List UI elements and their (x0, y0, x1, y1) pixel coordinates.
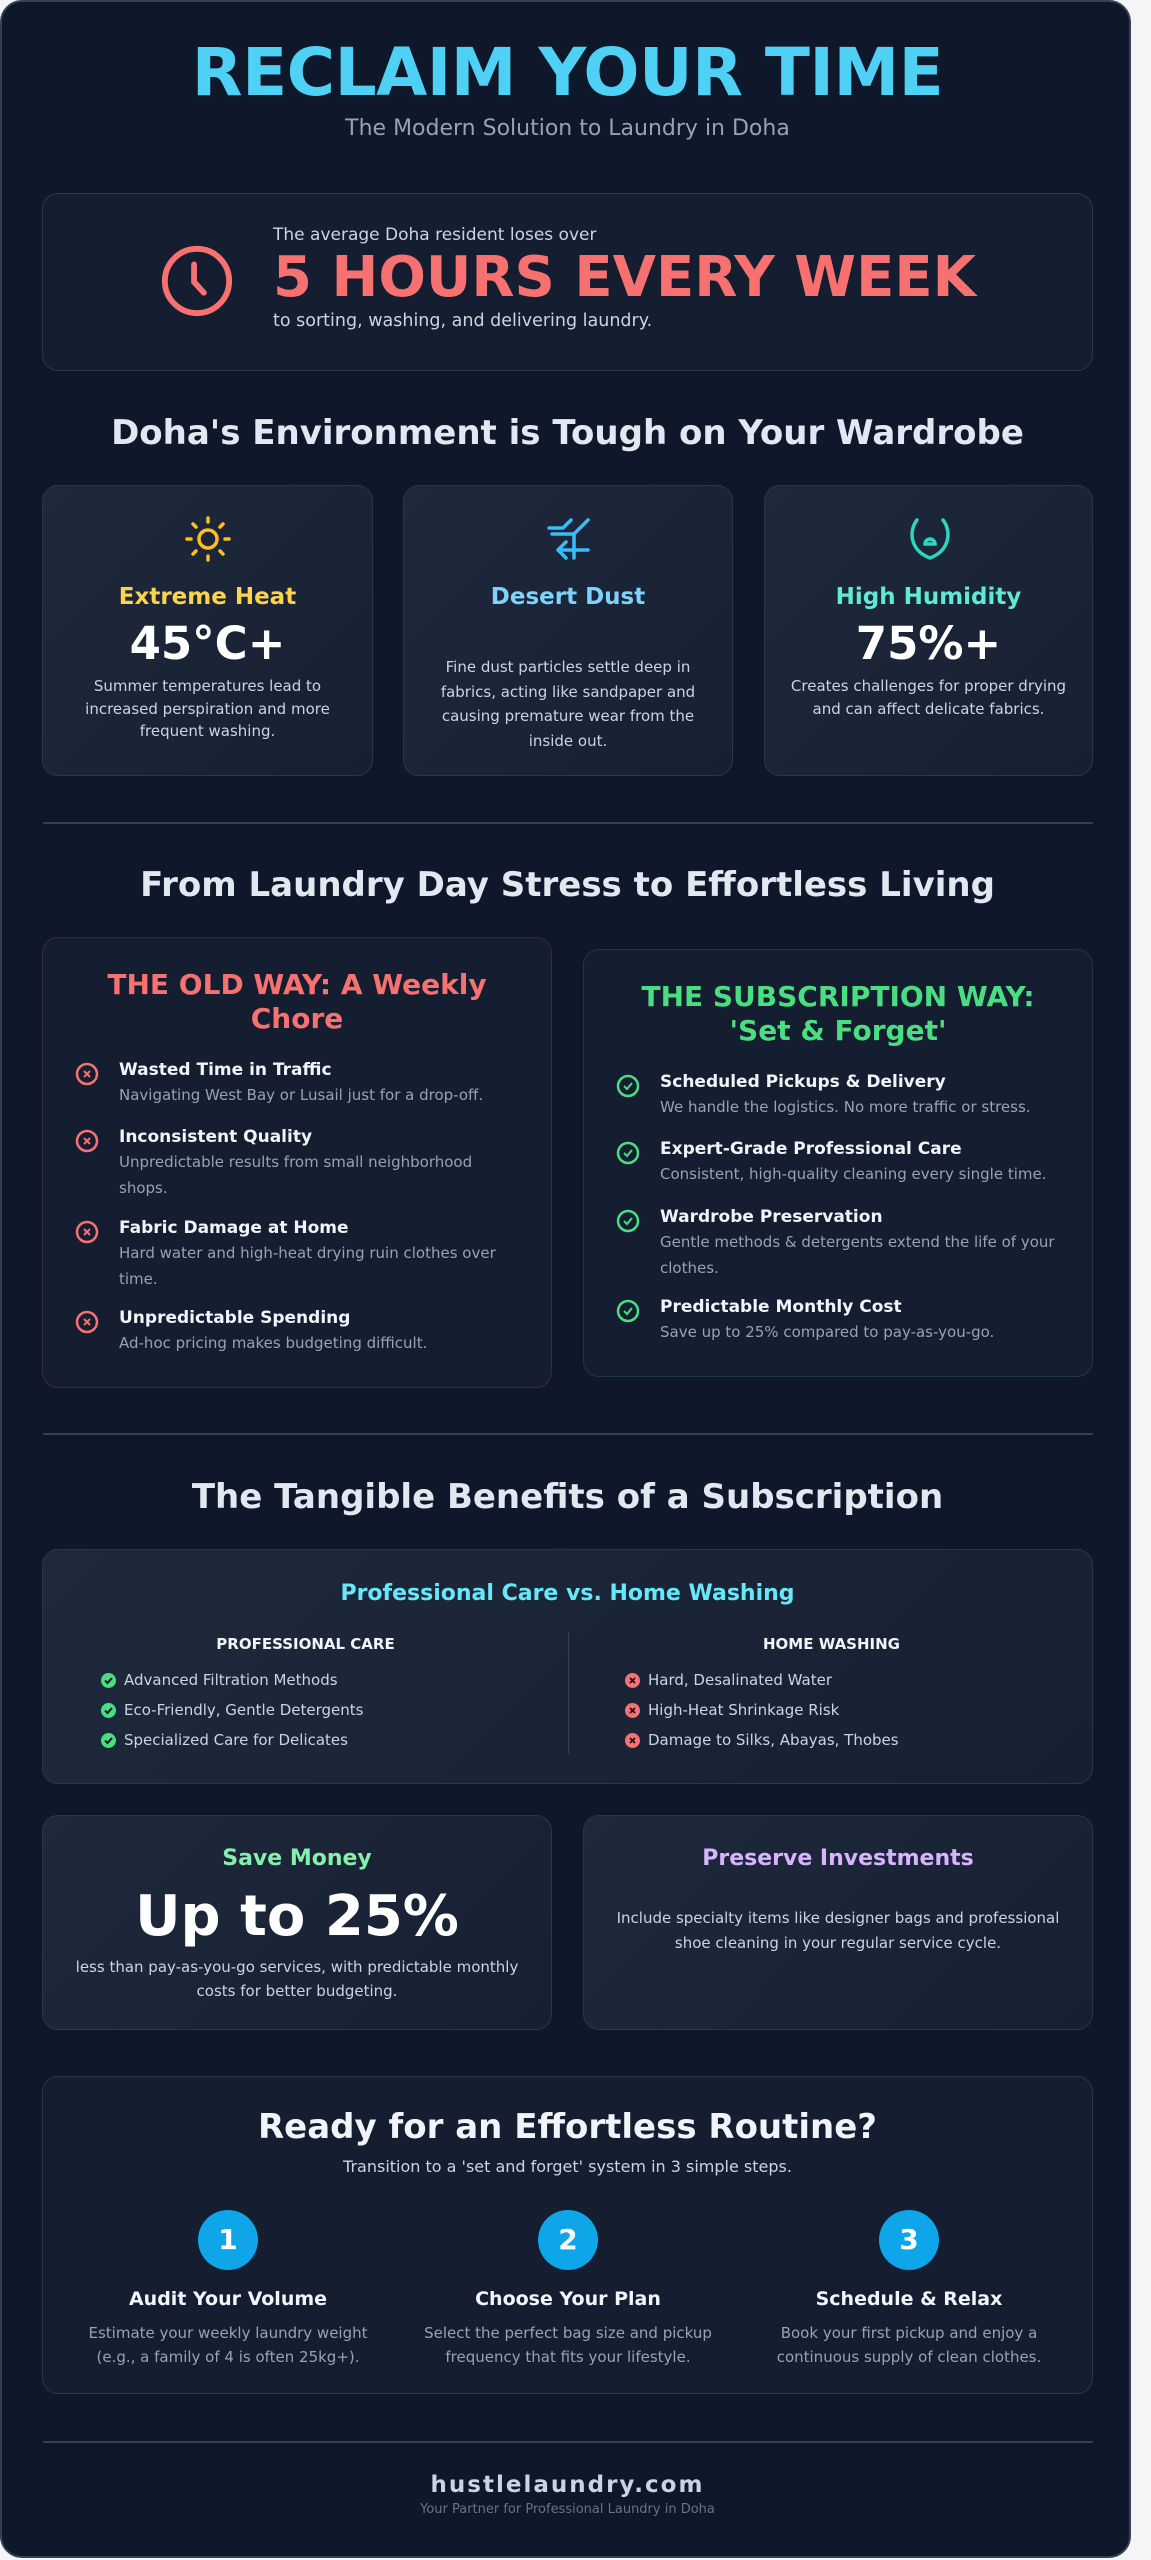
footer: hustlelaundry.com (431, 2472, 704, 2498)
list: subscription items (616, 1072, 1055, 1341)
panel: comparison (42, 1549, 1093, 1784)
step 3: Book your first pickup and enjoy a continuous supply of clean clothes. (777, 2324, 1041, 2366)
list: old way items: Unpredictable results from small neighborhood shops. (119, 1153, 472, 1197)
column: professional care: Advanced Filtration Methods (124, 1671, 338, 1689)
step 1: Estimate your weekly laundry weight (e.g., a family of 4 is often 25kg+). (88, 2324, 368, 2366)
list: old way items: Unpredictable Spending (119, 1308, 350, 1328)
panel: ready steps (42, 2076, 1093, 2394)
step 1: Audit Your Volume (129, 2288, 327, 2310)
column: home washing: Damage to Silks, Abayas, Thobes (648, 1731, 899, 1749)
step 1: 1 (218, 2223, 238, 2256)
heading: subscription way: 'Set & Forget' (729, 1014, 947, 1047)
title: RECLAIM YOUR TIME (192, 34, 943, 111)
panel: save money: Up to 25% (135, 1884, 459, 1949)
heading: stress to effortless: From Laundry Day Stress to Effortless Living (140, 865, 995, 905)
list: old way items: Ad-hoc pricing makes budgeting difficult. (119, 1334, 427, 1352)
panel: high humidity: High Humidity (836, 584, 1021, 610)
list: subscription items: We handle the logistics. No more traffic or stress. (660, 1098, 1031, 1116)
panel: extreme heat (42, 485, 373, 776)
text: hours lost: The average Doha resident loses over (273, 225, 596, 245)
icon: sun (185, 516, 231, 562)
heading: benefits: The Tangible Benefits of a Subscription (192, 1477, 943, 1517)
list: old way items: Navigating West Bay or Lusail just for a drop-off. (119, 1086, 483, 1104)
column: home washing: High-Heat Shrinkage Risk (648, 1701, 839, 1719)
column: professional care: Eco-Friendly, Gentle Detergents (124, 1701, 363, 1719)
column: professional care (101, 1635, 395, 1749)
panel: desert dust (403, 485, 733, 776)
icon: clock (162, 246, 232, 316)
panel: save money (42, 1815, 552, 2030)
step 3: 3 (899, 2223, 919, 2256)
subtitle: The Modern Solution to Laundry in Doha (345, 116, 790, 141)
text: hours lost: 5 HOURS EVERY WEEK (273, 245, 976, 310)
panel: high humidity: Creates challenges for proper drying and can affect delicate fabrics. (791, 677, 1066, 718)
icon: wind (547, 518, 590, 560)
list: subscription items: Gentle methods & detergents extend the life of your clothes. (660, 1233, 1055, 1277)
panel: high humidity (764, 485, 1093, 776)
heading: comparison: Professional Care vs. Home Washing (340, 1581, 795, 1606)
icon: humidity (910, 518, 950, 560)
list: subscription items: Predictable Monthly Cost (660, 1297, 902, 1317)
footer: Your Partner for Professional Laundry in Doha (420, 2502, 715, 2517)
heading: old way: Chore (251, 1002, 343, 1035)
panel: save money: Save Money (222, 1846, 372, 1871)
list: subscription items: Wardrobe Preservation (660, 1207, 883, 1227)
panel: preserve investments: Preserve Investments (702, 1846, 974, 1871)
panel: extreme heat: 45°C+ (130, 617, 285, 670)
panel: preserve investments: Include specialty items like designer bags and professional shoe cleaning in your regular service cycle. (617, 1909, 1059, 1952)
panel: high humidity: 75%+ (856, 617, 1001, 670)
panel: desert dust: Desert Dust (491, 584, 645, 610)
panel: save money: less than pay-as-you-go services, with predictable monthly costs for better budgeting. (76, 1958, 518, 2000)
column: professional care: PROFESSIONAL CARE (216, 1635, 395, 1653)
footer (420, 2472, 715, 2517)
list: old way items: Wasted Time in Traffic (119, 1060, 332, 1080)
list: old way items: Hard water and high-heat drying ruin clothes over time. (119, 1244, 496, 1288)
list: old way items: Fabric Damage at Home (119, 1218, 349, 1238)
column: professional care: Specialized Care for Delicates (124, 1731, 348, 1749)
heading: environment: Doha's Environment is Tough on Your Wardrobe (111, 413, 1024, 453)
heading: old way: THE OLD WAY: A Weekly (107, 968, 487, 1001)
step 3: Schedule & Relax (816, 2288, 1002, 2310)
list: old way items: Inconsistent Quality (119, 1127, 312, 1147)
step 3 (777, 2210, 1041, 2366)
heading: old way (107, 968, 487, 1035)
panel: ready steps: Ready for an Effortless Routine? (258, 2107, 877, 2147)
step 2: Choose Your Plan (475, 2288, 661, 2310)
step 1 (88, 2210, 368, 2366)
panel: ready steps: Transition to a 'set and forget' system in 3 simple steps. (343, 2157, 792, 2176)
text: hours lost: to sorting, washing, and delivering laundry. (273, 311, 652, 331)
panel: subscription way (583, 949, 1093, 1377)
list: old way items (76, 1060, 496, 1352)
step 2: 2 (558, 2223, 578, 2256)
column: home washing: Hard, Desalinated Water (648, 1671, 832, 1689)
list: subscription items: Expert-Grade Professional Care (660, 1139, 962, 1159)
step 2 (424, 2210, 712, 2366)
panel: extreme heat: Extreme Heat (119, 584, 296, 610)
step 2: Select the perfect bag size and pickup frequency that fits your lifestyle. (424, 2324, 712, 2366)
text: hours lost (272, 225, 978, 331)
heading: subscription way: THE SUBSCRIPTION WAY: (641, 980, 1035, 1013)
heading: subscription way (641, 980, 1035, 1047)
list: subscription items: Scheduled Pickups & Delivery (660, 1072, 946, 1092)
panel: time lost (42, 193, 1093, 371)
panel: preserve investments (583, 1815, 1093, 2030)
list: subscription items: Consistent, high-quality cleaning every single time. (660, 1165, 1046, 1183)
panel: old way (42, 937, 552, 1388)
panel: desert dust: Fine dust particles settle deep in fabrics, acting like sandpaper and causing premature wear from the inside out. (441, 658, 695, 750)
list: subscription items: Save up to 25% compared to pay-as-you-go. (660, 1323, 994, 1341)
panel: extreme heat: Summer temperatures lead to increased perspiration and more frequent washing. (85, 677, 330, 740)
column: home washing (625, 1635, 900, 1749)
column: home washing: HOME WASHING (763, 1635, 900, 1653)
